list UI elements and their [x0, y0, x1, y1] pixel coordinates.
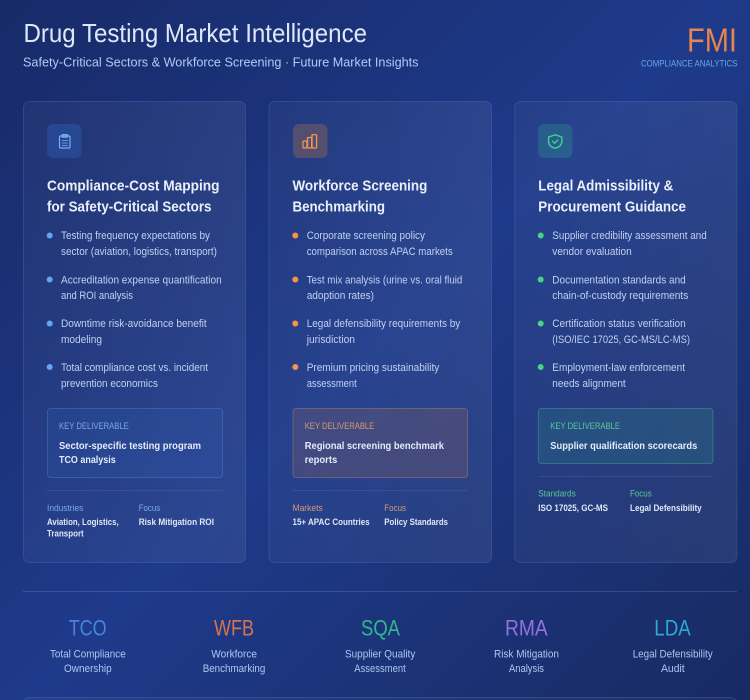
icon: clipboard [47, 124, 82, 158]
logo tagline: COMPLIANCE ANALYTICS [641, 58, 738, 68]
meta: markets and focus: Focus [384, 503, 406, 513]
bullet list: Documentation standards and [552, 274, 686, 286]
bullet list [538, 230, 707, 390]
heading: Workforce Screening [292, 178, 427, 195]
metric: RMA: Risk Mitigation [494, 648, 559, 660]
bullet list: and ROI analysis [61, 290, 133, 302]
meta: standards and focus [538, 488, 702, 513]
callout: key deliverable [538, 408, 713, 464]
callout: key deliverable: KEY DELIVERABLE [305, 421, 374, 431]
bullet list: Accreditation expense quantification [61, 274, 222, 286]
meta: industries and focus: Industries [47, 503, 84, 513]
bullet list: comparison across APAC markets [307, 246, 453, 258]
metric: RMA: Analysis [509, 663, 544, 675]
heading: Benchmarking [292, 198, 385, 215]
meta: markets and focus: 15+ APAC Countries [292, 517, 370, 527]
bullet list: Premium pricing sustainability [307, 362, 440, 374]
meta: industries and focus: Risk Mitigation ROI [139, 517, 214, 527]
callout: key deliverable [293, 408, 468, 478]
metric: WFB: Workforce [211, 648, 257, 660]
callout: key deliverable: reports [305, 454, 337, 466]
callout: key deliverable: KEY DELIVERABLE [59, 421, 129, 431]
bullet list: chain-of-custody requirements [552, 290, 689, 302]
metric: WFB: WFB [214, 616, 254, 641]
metric: LDA: LDA [654, 616, 691, 641]
panel: legal admissibility and procurement [515, 102, 737, 562]
metric: TCO: Total Compliance [50, 648, 126, 660]
bullet list [292, 230, 462, 390]
metric: WFB: Benchmarking [203, 663, 265, 675]
footer metrics strip [50, 616, 713, 675]
meta: standards and focus: ISO 17025, GC-MS [538, 503, 608, 513]
metric: SQA: Assessment [354, 663, 406, 675]
panel: compliance-cost mapping [24, 102, 246, 562]
bullet list: Legal defensibility requirements by [307, 318, 461, 330]
callout: key deliverable: KEY DELIVERABLE [550, 421, 620, 431]
header [23, 18, 738, 70]
logo: FMI: FMI [687, 22, 737, 58]
bullet list: needs alignment [552, 378, 626, 390]
metric: SQA: SQA [361, 616, 400, 641]
metric: RMA: RMA [505, 616, 548, 641]
meta: markets and focus: Policy Standards [384, 517, 448, 527]
bullet list: prevention economics [61, 378, 158, 390]
heading [292, 178, 427, 215]
bullet list: sector (aviation, logistics, transport) [61, 246, 217, 258]
title: Drug Testing Market Intelligence [24, 18, 367, 48]
metric: TCO: TCO [69, 616, 107, 641]
callout: key deliverable: Regional screening benchmark [305, 440, 444, 452]
metric: WFB [203, 616, 265, 675]
panel: workforce screening benchmarking [269, 102, 492, 562]
meta: standards and focus: Legal Defensibility [630, 503, 702, 513]
metric: LDA: Audit [661, 663, 685, 675]
bullet list: Downtime risk-avoidance benefit [61, 318, 207, 330]
heading [47, 178, 220, 215]
bullet list: vendor evaluation [552, 246, 632, 258]
icon: bar chart [293, 124, 328, 158]
bullet list: modeling [61, 334, 102, 346]
heading: Procurement Guidance [538, 198, 686, 215]
metric: SQA: Supplier Quality [345, 648, 416, 660]
subtitle: Safety-Critical Sectors & Workforce Screening · Future Market Insights [23, 54, 419, 70]
bullet list: Supplier credibility assessment and [552, 230, 707, 242]
bullet list [47, 230, 222, 390]
callout: key deliverable: Supplier qualification scorecards [550, 440, 697, 452]
metric: RMA [494, 616, 559, 675]
metric: SQA [345, 616, 416, 675]
callout: key deliverable: Sector-specific testing program [59, 440, 201, 452]
meta: markets and focus [292, 503, 448, 527]
bullet list: Testing frequency expectations by [61, 230, 210, 242]
bullet list: Corporate screening policy [307, 230, 425, 242]
icon: shield [538, 124, 572, 158]
bullet list: Total compliance cost vs. incident [61, 362, 209, 374]
heading: Legal Admissibility & [538, 178, 673, 195]
callout: key deliverable: TCO analysis [59, 454, 116, 466]
bullet list: Employment-law enforcement [552, 362, 686, 374]
bullet list: (ISO/IEC 17025, GC-MS/LC-MS) [552, 334, 690, 346]
meta: standards and focus: Focus [630, 488, 652, 498]
meta: industries and focus: Transport [47, 529, 84, 539]
metric: TCO [50, 616, 126, 675]
metric: LDA: Legal Defensibility [633, 648, 713, 660]
heading: Compliance-Cost Mapping [47, 178, 220, 195]
bullet list: Test mix analysis (urine vs. oral fluid [307, 274, 462, 286]
bullet list: jurisdiction [306, 334, 355, 346]
meta: industries and focus [47, 503, 214, 539]
heading [538, 178, 686, 215]
meta: markets and focus: Markets [292, 503, 323, 513]
bullet list: Certification status verification [552, 318, 686, 330]
meta: industries and focus: Focus [139, 503, 161, 513]
bullet list: assessment [307, 378, 357, 390]
heading: for Safety-Critical Sectors [47, 198, 212, 215]
metric: LDA [633, 616, 713, 675]
bullet list: adoption rates) [307, 290, 374, 302]
callout: key deliverable [48, 408, 222, 478]
bottom panel edge [24, 698, 736, 700]
meta: standards and focus: Standards [538, 488, 576, 498]
meta: industries and focus: Aviation, Logistics, [47, 517, 119, 527]
metric: TCO: Ownership [64, 663, 112, 675]
